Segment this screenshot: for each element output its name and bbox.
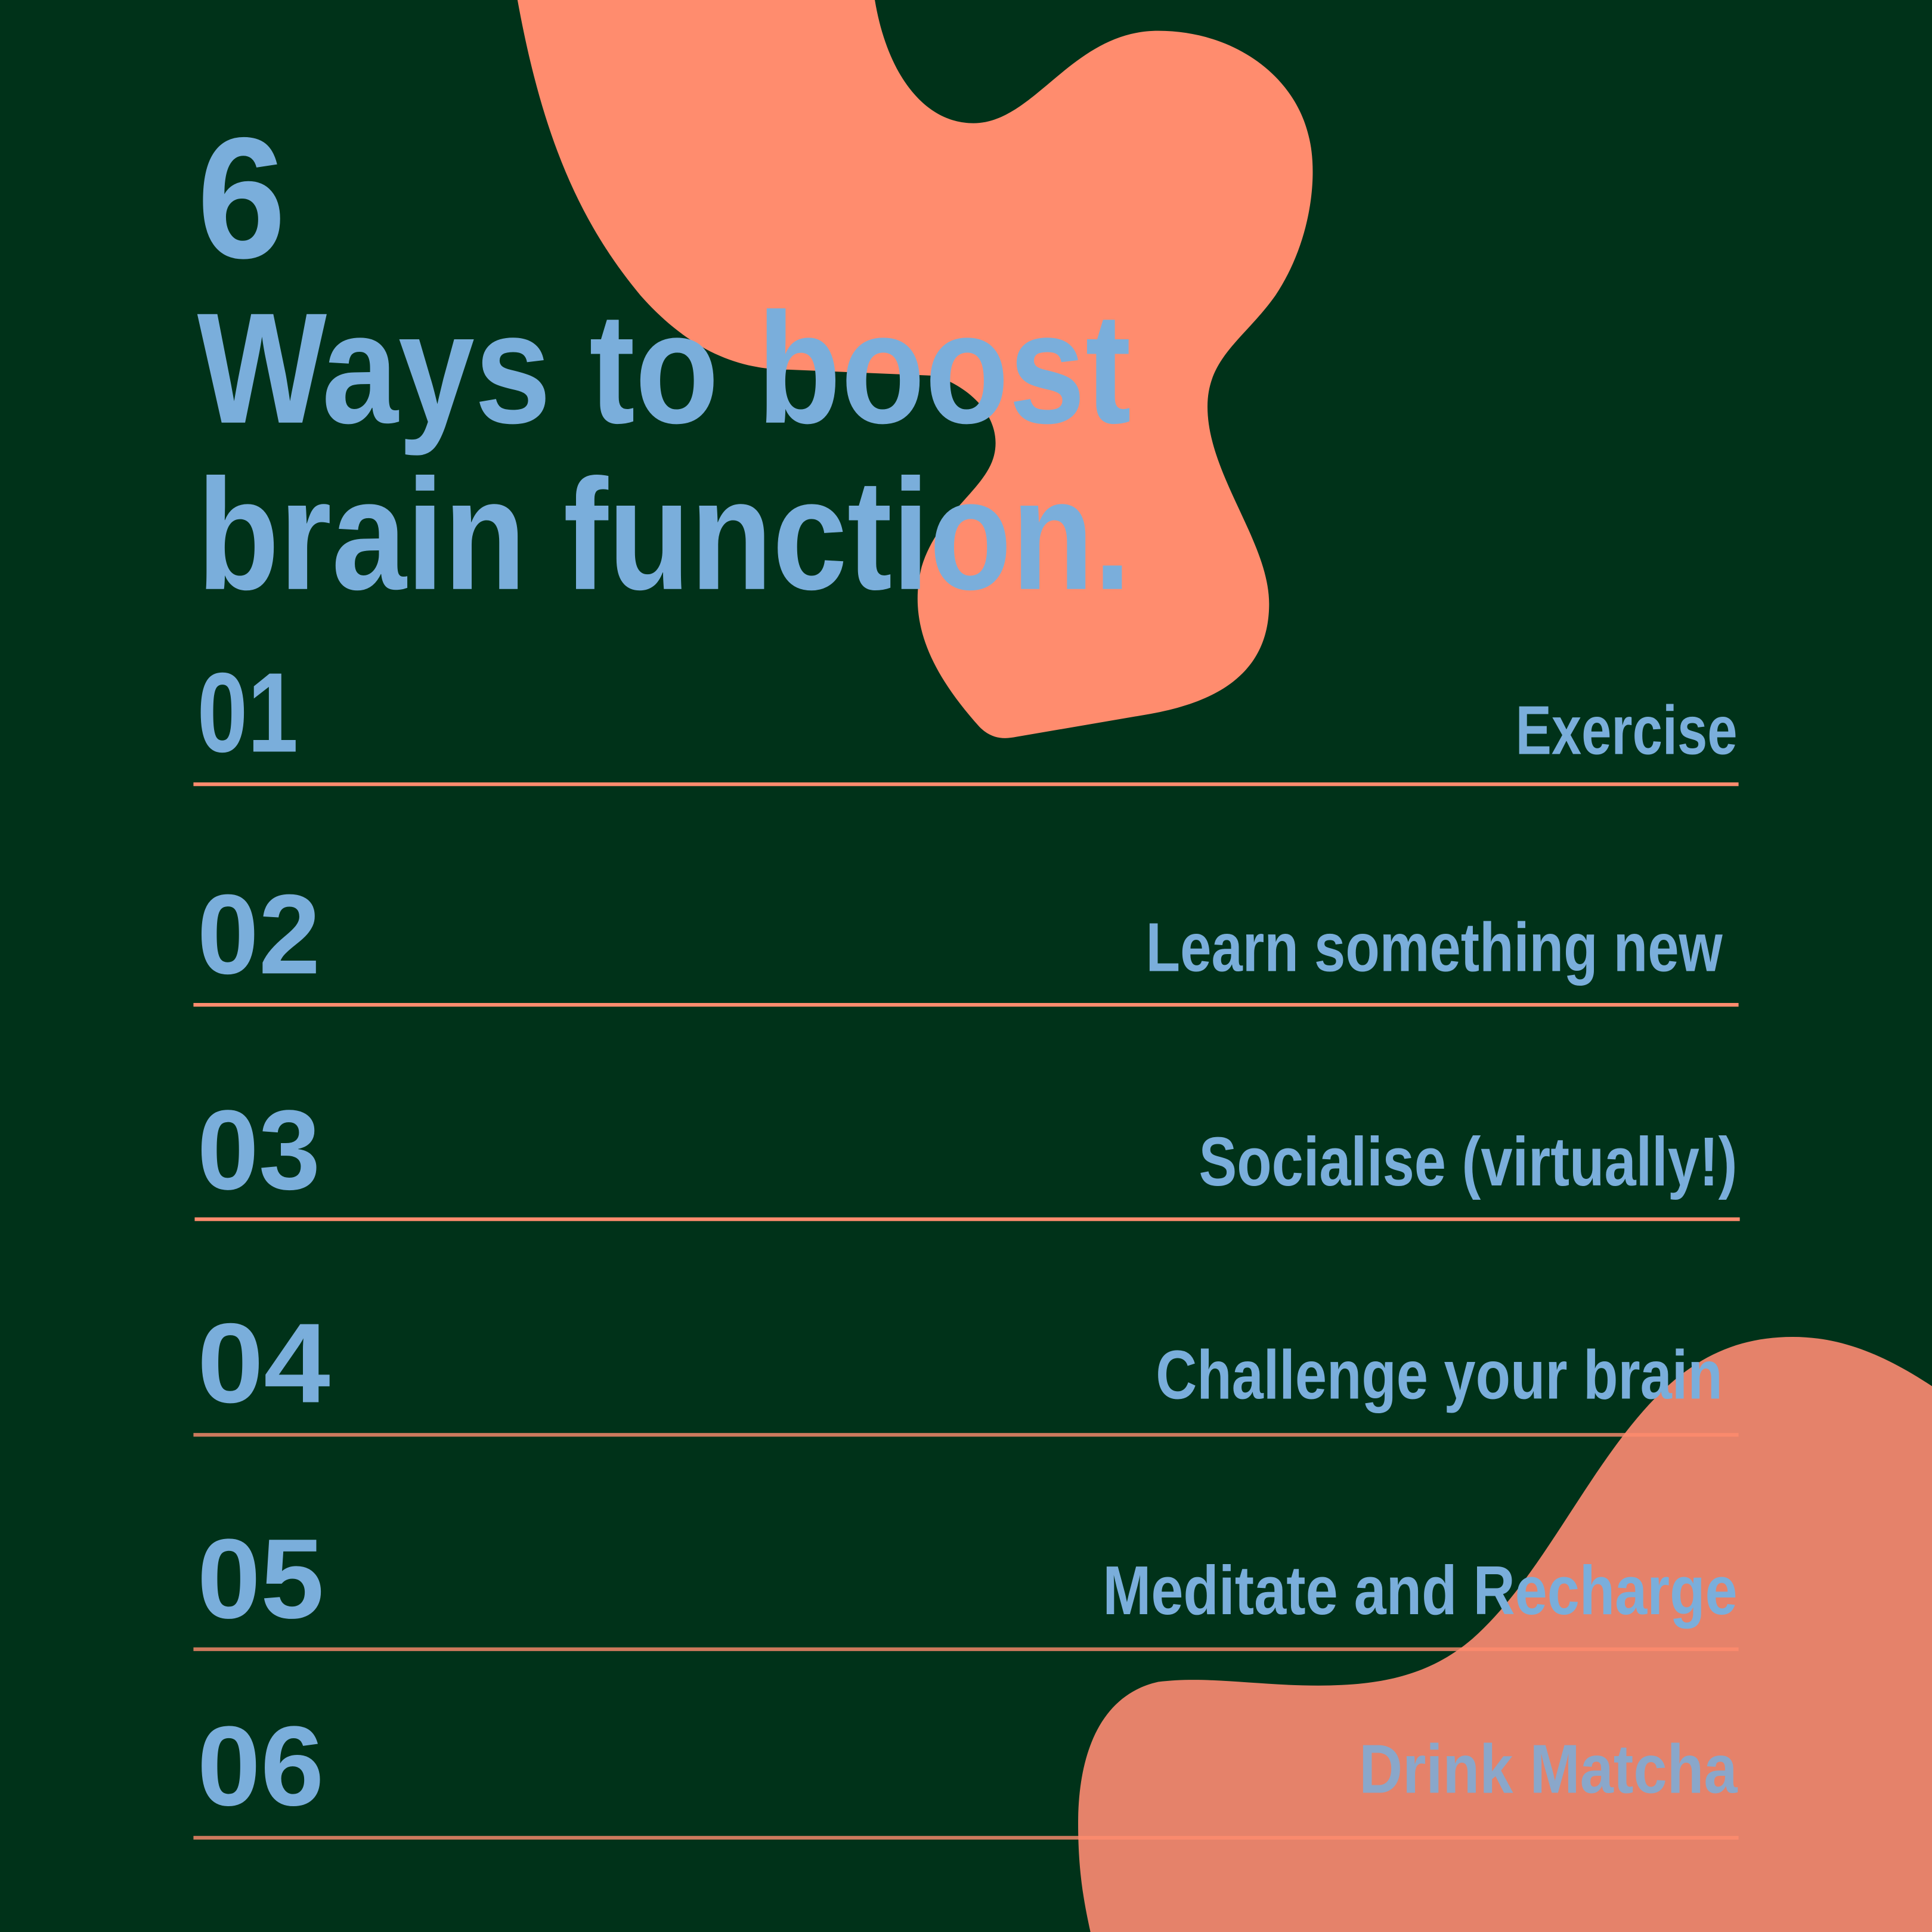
- list: row 05: [193, 1516, 1739, 1651]
- list: row 03: 03: [197, 1087, 320, 1213]
- list: row 05: 05: [197, 1516, 324, 1642]
- list: row 02: Learn something new: [1146, 908, 1723, 986]
- list: row 04: Challenge your brain: [1156, 1336, 1723, 1413]
- list: row 04: 04: [197, 1300, 330, 1426]
- list: row 03: [194, 1087, 1740, 1221]
- blob: top coral: [518, 0, 1312, 738]
- title: brain function.: [197, 447, 1131, 623]
- list: row 04: [193, 1300, 1739, 1436]
- title: [197, 102, 1131, 623]
- list: row 01: Exercise: [1516, 692, 1738, 769]
- list: row 02: [193, 871, 1739, 1007]
- list: row 01: 01: [197, 649, 298, 776]
- list: row 02: 02: [197, 871, 320, 998]
- list: row 06: [193, 1703, 1739, 1840]
- list: row 05: Meditate and Recharge: [1103, 1552, 1738, 1629]
- list: row 01: [193, 649, 1739, 786]
- list: row 03: Socialise (virtually!): [1199, 1123, 1738, 1200]
- list: row 06: 06: [197, 1703, 324, 1829]
- list: row 06: Drink Matcha: [1359, 1730, 1738, 1808]
- title: Ways to boost: [197, 281, 1131, 457]
- title: 6: [197, 102, 286, 295]
- blob: bottom coral: [1078, 1337, 1932, 1932]
